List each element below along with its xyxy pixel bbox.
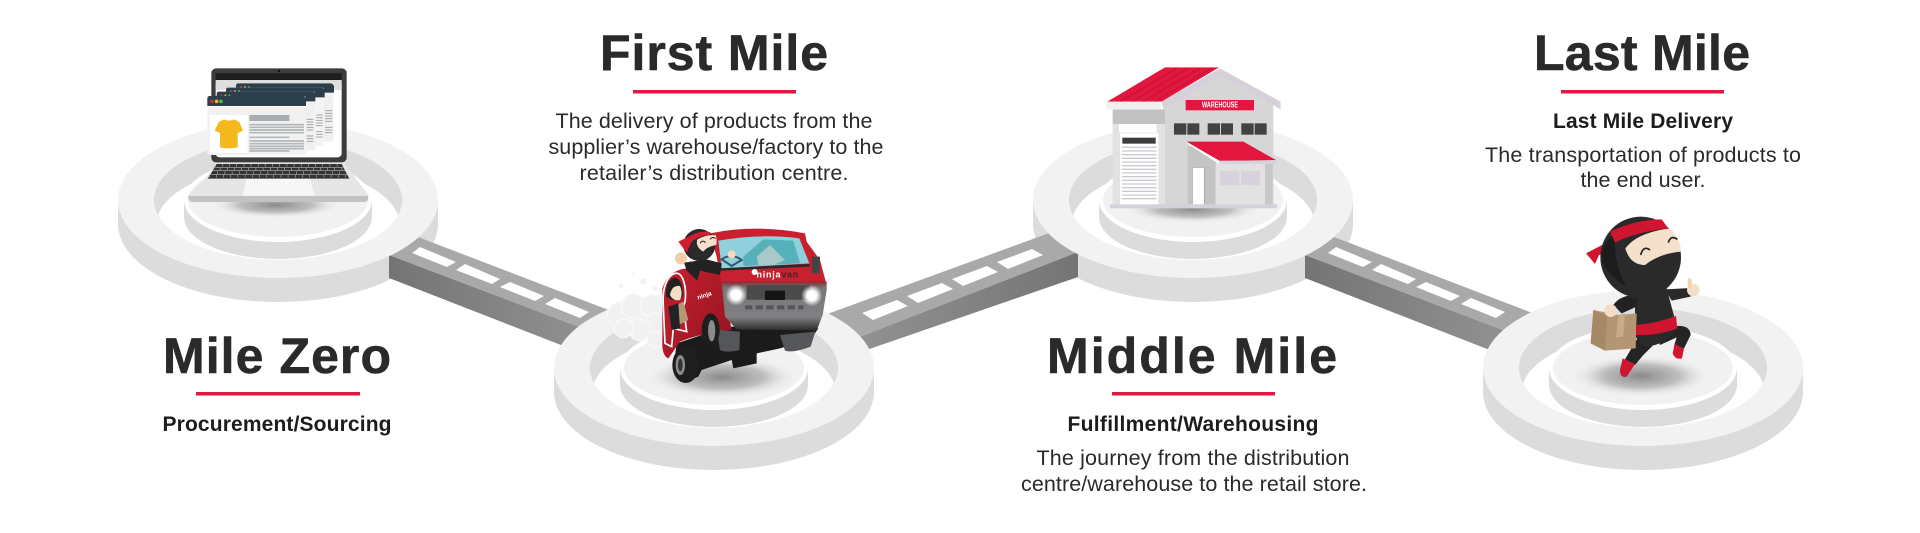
parcel xyxy=(1591,310,1637,351)
road: mile zero to first mile xyxy=(380,237,640,368)
panel: last mile text xyxy=(1485,25,1801,192)
panel: mile zero text xyxy=(162,328,392,436)
side wheel xyxy=(702,313,720,347)
upper windows xyxy=(1174,123,1267,135)
description xyxy=(1485,143,1801,192)
ring: first mile xyxy=(554,290,874,470)
red divider xyxy=(196,392,360,396)
ring: last mile xyxy=(1483,290,1803,470)
browser window 3 xyxy=(226,88,325,146)
van roof and cab xyxy=(710,229,827,285)
carrying arm xyxy=(1613,295,1637,313)
torso xyxy=(1635,288,1677,347)
subheading: Last Mile Delivery xyxy=(1553,110,1733,133)
heading: First Mile xyxy=(600,25,828,81)
keyboard xyxy=(208,164,349,179)
porch xyxy=(1186,142,1277,205)
heading: Mile Zero xyxy=(163,328,391,384)
roller door xyxy=(1120,133,1158,205)
arm and thumb xyxy=(1665,278,1700,301)
red divider xyxy=(1112,392,1275,396)
ring: middle mile xyxy=(1033,122,1353,286)
description: The journey from the distribution xyxy=(1036,446,1350,470)
panel: middle mile text xyxy=(1021,328,1367,496)
van logo text: ninjavan xyxy=(756,269,798,279)
undercarriage xyxy=(673,327,818,383)
description xyxy=(1021,446,1367,496)
left wing wall xyxy=(1113,109,1165,205)
sticker ninja xyxy=(663,273,688,347)
warehouse base xyxy=(1110,204,1277,208)
screen bezel xyxy=(211,68,347,162)
subheading: Fulfillment/Warehousing xyxy=(1068,413,1318,436)
browser window 4 xyxy=(236,83,334,142)
browser window front xyxy=(207,96,306,155)
icon: ninja van: ninja xyxy=(696,290,713,302)
side panel xyxy=(662,265,732,358)
bandana tail xyxy=(1586,237,1617,264)
icon: ninja van xyxy=(607,229,827,383)
icon: yellow t-shirt xyxy=(215,119,243,148)
ring base: mile zero xyxy=(118,200,438,302)
front leg and shoe xyxy=(1620,335,1655,377)
description: The delivery of products from the xyxy=(556,109,872,133)
main wall xyxy=(1165,74,1273,205)
road: first mile to middle mile xyxy=(800,232,1090,366)
windshield xyxy=(718,236,809,268)
warehouse sign: WAREHOUSE xyxy=(1202,101,1238,110)
gable trim xyxy=(1162,68,1281,109)
description: centre/warehouse to the retail store. xyxy=(1021,472,1367,496)
icon: laptop with browser windows xyxy=(188,68,368,202)
laptop base xyxy=(188,160,368,202)
panel: first mile text xyxy=(548,25,884,185)
warehouse sign xyxy=(1186,100,1254,110)
shadow: warehouse xyxy=(1125,195,1261,223)
ninja driver waving xyxy=(675,229,722,281)
red roof xyxy=(1107,67,1219,102)
description: supplier’s warehouse/factory to the xyxy=(548,135,884,159)
description: the end user. xyxy=(1580,168,1706,192)
shadow: ninja xyxy=(1571,355,1711,397)
red divider xyxy=(1561,90,1724,94)
description: retailer’s distribution centre. xyxy=(580,161,848,185)
belt xyxy=(1636,316,1677,335)
subheading: Procurement/Sourcing xyxy=(162,413,392,436)
front grille xyxy=(722,282,827,331)
ring: mile zero xyxy=(118,122,438,286)
back leg and shoe xyxy=(1657,326,1691,359)
road: middle mile to last mile xyxy=(1296,237,1556,368)
icon: running ninja with parcel xyxy=(1586,217,1700,377)
headlights xyxy=(725,284,747,306)
ring base: middle mile xyxy=(1033,200,1353,302)
exhaust smoke xyxy=(607,272,666,347)
red divider xyxy=(633,90,796,94)
shadow: laptop xyxy=(210,192,342,218)
description: The transportation of products to xyxy=(1485,143,1801,167)
shadow: van xyxy=(646,356,798,398)
heading: Middle Mile xyxy=(1047,328,1337,384)
browser window 2 xyxy=(217,92,315,151)
heading: Last Mile xyxy=(1534,25,1750,81)
icon: warehouse xyxy=(1106,67,1281,208)
front tyres xyxy=(717,330,740,352)
rear wheel xyxy=(672,347,699,383)
description xyxy=(548,109,884,185)
head xyxy=(1600,217,1681,298)
